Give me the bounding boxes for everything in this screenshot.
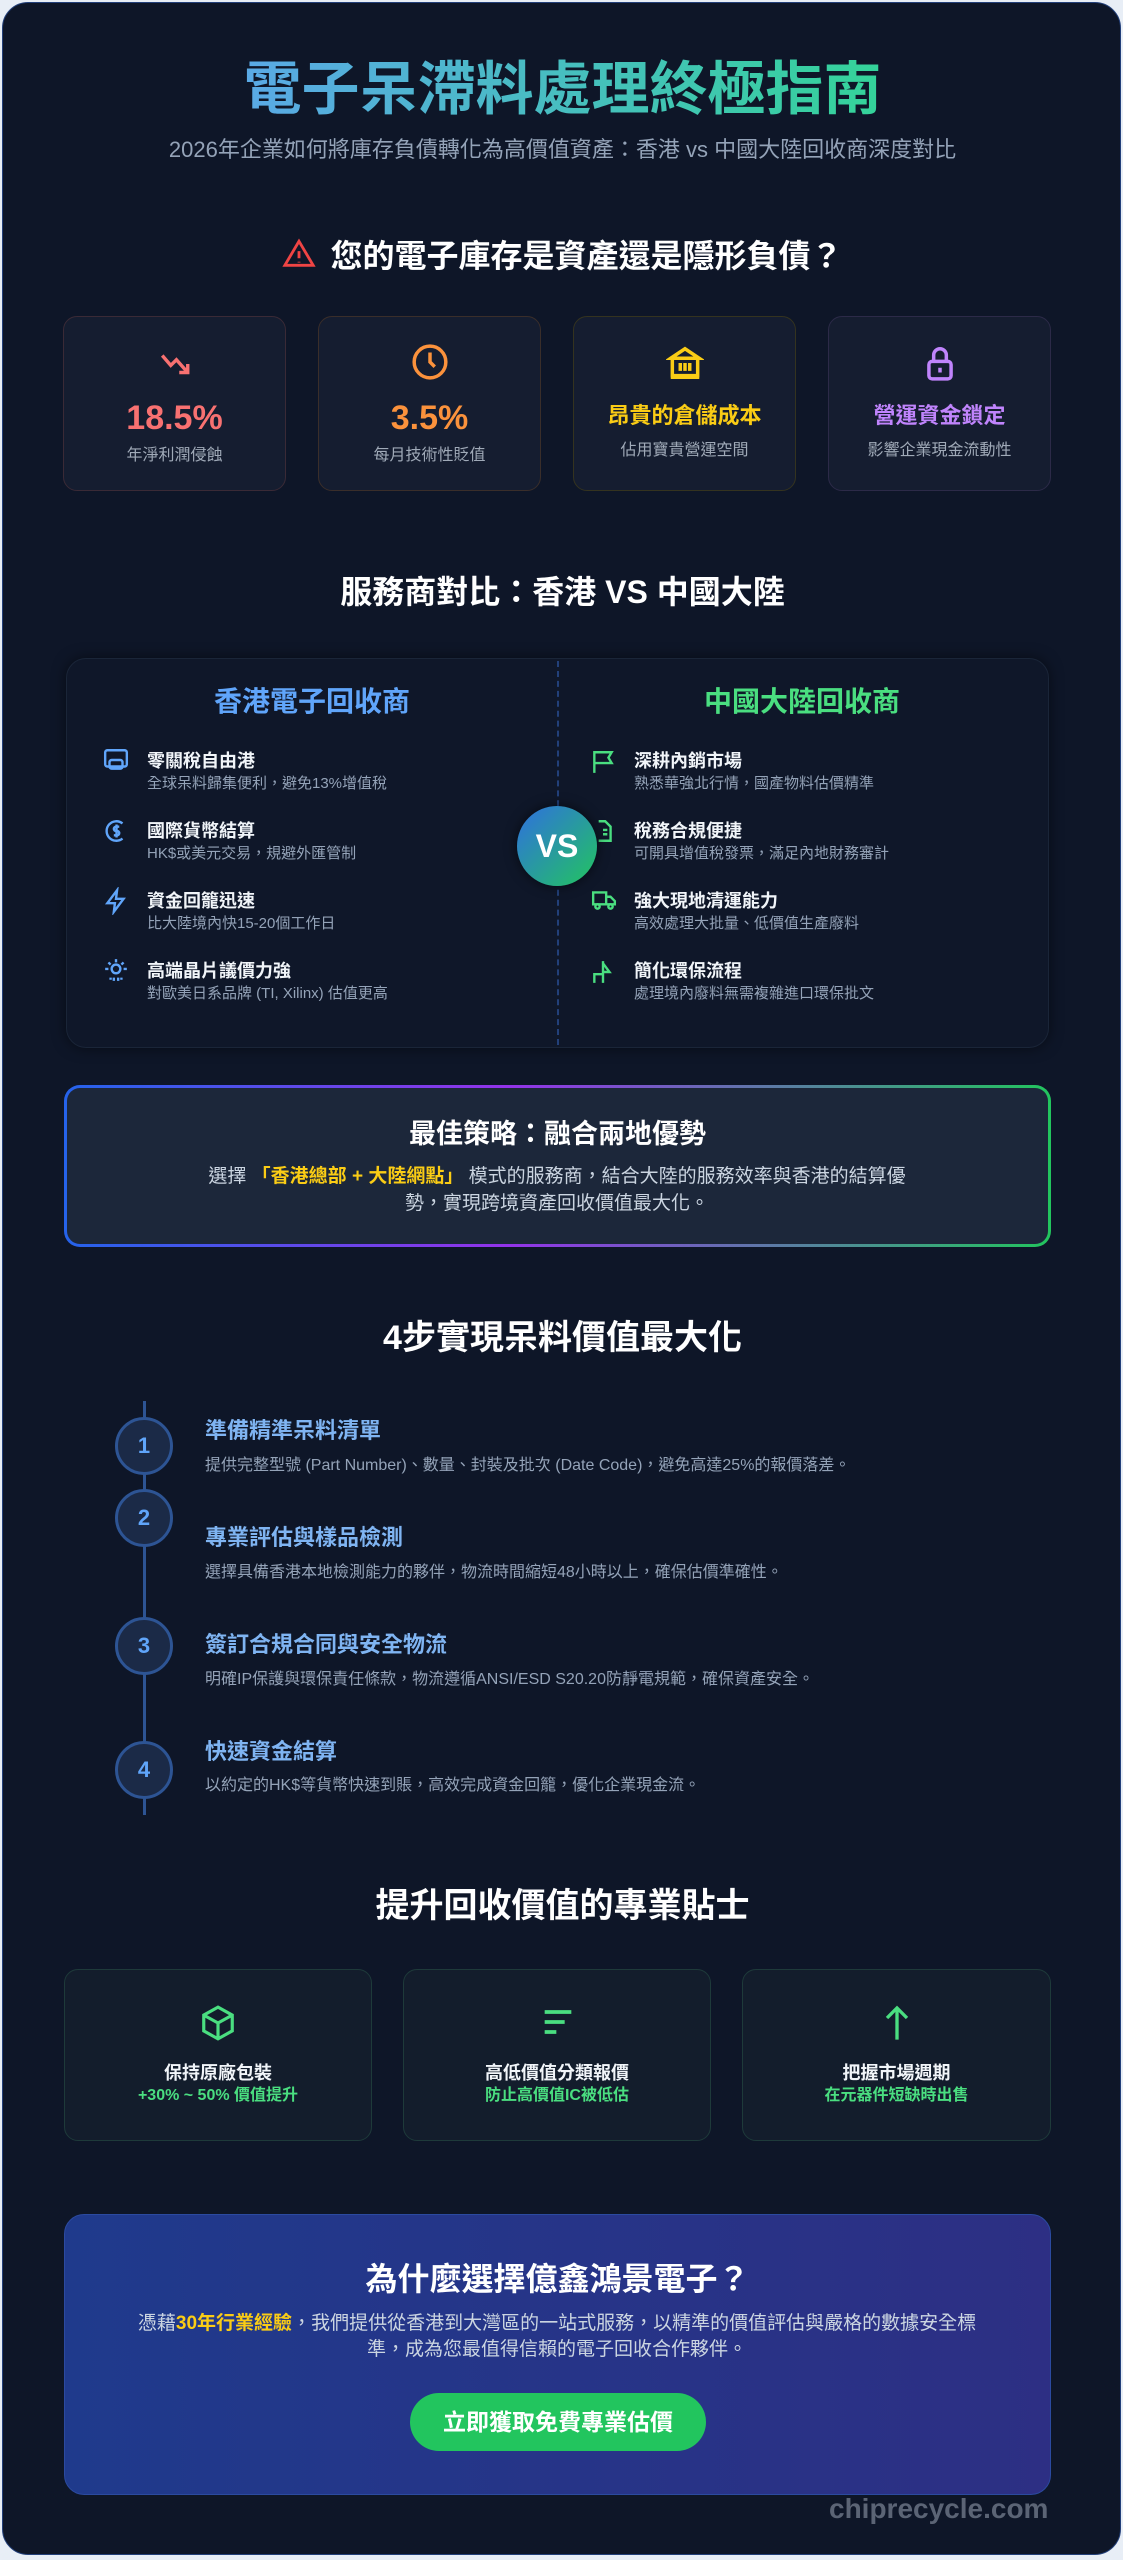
stat card 4 — [828, 316, 1051, 491]
left items: 比大陸境內快15-20個工作日 — [147, 915, 335, 932]
step 1: 準備精準呆料清單 — [205, 1418, 381, 1443]
left items: HK$或美元交易，規避外匯管制 — [147, 845, 356, 862]
stat card 1 — [63, 316, 286, 491]
strategy callout: 選擇 「香港總部 + 大陸網點」 模式的服務商，結合大陸的服務效率與香港的結算優勢，實現跨境資產回收價值最大化。 — [208, 1166, 906, 1214]
watermark: chiprecycle.com — [829, 2493, 1048, 2524]
right items: 稅務合規便捷 — [634, 821, 742, 841]
strategy callout: 最佳策略：融合兩地優勢 — [409, 1119, 706, 1149]
right items: 高效處理大批量、低價值生產廢料 — [634, 915, 859, 932]
CTA button: 立即獲取免費專業估價 — [443, 2409, 673, 2435]
heading: 4 steps: 4步實現呆料價值最大化 — [383, 1319, 742, 1357]
CTA panel: 為什麼選擇億鑫鴻景電子？ — [365, 2261, 750, 2297]
left items: 高端晶片議價力強 — [147, 961, 291, 981]
timeline — [115, 1401, 850, 1815]
left items — [104, 749, 388, 1002]
stat card 1: 18.5% — [126, 399, 223, 437]
timeline: 4 — [138, 1757, 150, 1782]
tip card 1: +30% ~ 50% 價值提升 — [138, 2087, 298, 2104]
title: 電子呆滯料處理終極指南 — [243, 57, 882, 122]
stat card 2: 3.5% — [391, 399, 468, 437]
CTA button — [410, 2393, 706, 2451]
stat card 3: 昂貴的倉儲成本 — [607, 403, 762, 428]
strategy callout — [64, 1085, 1051, 1247]
tip card 3: 把握市場週期 — [842, 2063, 950, 2083]
timeline: 3 — [138, 1633, 150, 1658]
left items: 國際貨幣結算 — [147, 821, 255, 841]
stat card 1: 年淨利潤侵蝕 — [126, 447, 222, 464]
tip card 2: 高低價值分類報價 — [485, 2063, 629, 2083]
subtitle: 2026年企業如何將庫存負債轉化為高價值資產：香港 vs 中國大陸回收商深度對比 — [169, 137, 956, 162]
step 2: 專業評估與樣品檢測 — [205, 1525, 403, 1550]
VS badge: VS — [536, 828, 578, 864]
stat card 4: 影響企業現金流動性 — [867, 442, 1012, 459]
stat card 2: 每月技術性貶值 — [373, 447, 486, 464]
timeline: 1 — [138, 1433, 150, 1458]
tip card 3: 在元器件短缺時出售 — [824, 2087, 968, 2104]
tip card 3 — [742, 1969, 1051, 2141]
timeline: 2 — [138, 1505, 150, 1530]
CTA panel — [64, 2214, 1051, 2495]
step 4: 快速資金結算 — [205, 1739, 337, 1764]
right items — [592, 751, 889, 1002]
heading: tips: 提升回收價值的專業貼士 — [376, 1887, 750, 1925]
left heading: 香港電子回收商 — [214, 686, 410, 717]
timeline: 選擇具備香港本地檢測能力的夥伴，物流時間縮短48小時以上，確保估價準確性。 — [205, 1564, 783, 1581]
stat card 3: 佔用寶貴營運空間 — [620, 442, 748, 459]
left items: 零關稅自由港 — [147, 751, 255, 771]
right heading: 中國大陸回收商 — [704, 686, 900, 717]
left items: 資金回籠迅速 — [147, 891, 255, 911]
tip card 1: 保持原廠包裝 — [164, 2063, 272, 2083]
tip card 1 — [64, 1969, 372, 2141]
right items: 簡化環保流程 — [634, 961, 742, 981]
left items: 對歐美日系品牌 (TI, Xilinx) 估值更高 — [147, 985, 388, 1002]
heading: hidden liability: 您的電子庫存是資產還是隱形負債？ — [330, 238, 842, 274]
timeline: 以約定的HK$等貨幣快速到賬，高效完成資金回籠，優化企業現金流。 — [205, 1777, 700, 1794]
step 3: 簽訂合規合同與安全物流 — [205, 1632, 447, 1657]
right items: 強大現地清運能力 — [634, 891, 778, 911]
tip card 2: 防止高價值IC被低估 — [485, 2087, 629, 2104]
right items: 深耕內銷市場 — [634, 751, 742, 771]
right items: 處理境內廢料無需複雜進口環保批文 — [634, 985, 874, 1002]
timeline: 明確IP保護與環保責任條款，物流遵循ANSI/ESD S20.20防靜電規範，確保資產安全。 — [205, 1671, 814, 1688]
timeline: 提供完整型號 (Part Number)、數量、封裝及批次 (Date Code)，避免高達25%的報價落差。 — [205, 1457, 850, 1474]
icon: trend down — [161, 354, 190, 374]
VS badge — [517, 806, 597, 886]
left items: 全球呆料歸集便利，避免13%增值稅 — [147, 775, 387, 792]
icon: lock — [927, 347, 953, 381]
stat card 2 — [318, 316, 541, 491]
panel: comparison — [66, 658, 1049, 1048]
tip card 2 — [403, 1969, 711, 2141]
right items: 熟悉華強北行情，國產物料估價精準 — [634, 775, 874, 792]
stat card 4: 營運資金鎖定 — [873, 403, 1006, 428]
right items: 可開具增值稅發票，滿足內地財務審計 — [634, 845, 889, 862]
CTA panel: 憑藉30年行業經驗，我們提供從香港到大灣區的一站式服務，以精準的價值評估與嚴格的數據安全標準，成為您最值得信賴的電子回收合作夥伴。 — [138, 2313, 976, 2360]
icon: bank — [666, 346, 704, 379]
heading: comparison: 服務商對比：香港 VS 中國大陸 — [340, 574, 785, 610]
stat card 3 — [573, 316, 796, 491]
icon: clock — [412, 344, 448, 380]
